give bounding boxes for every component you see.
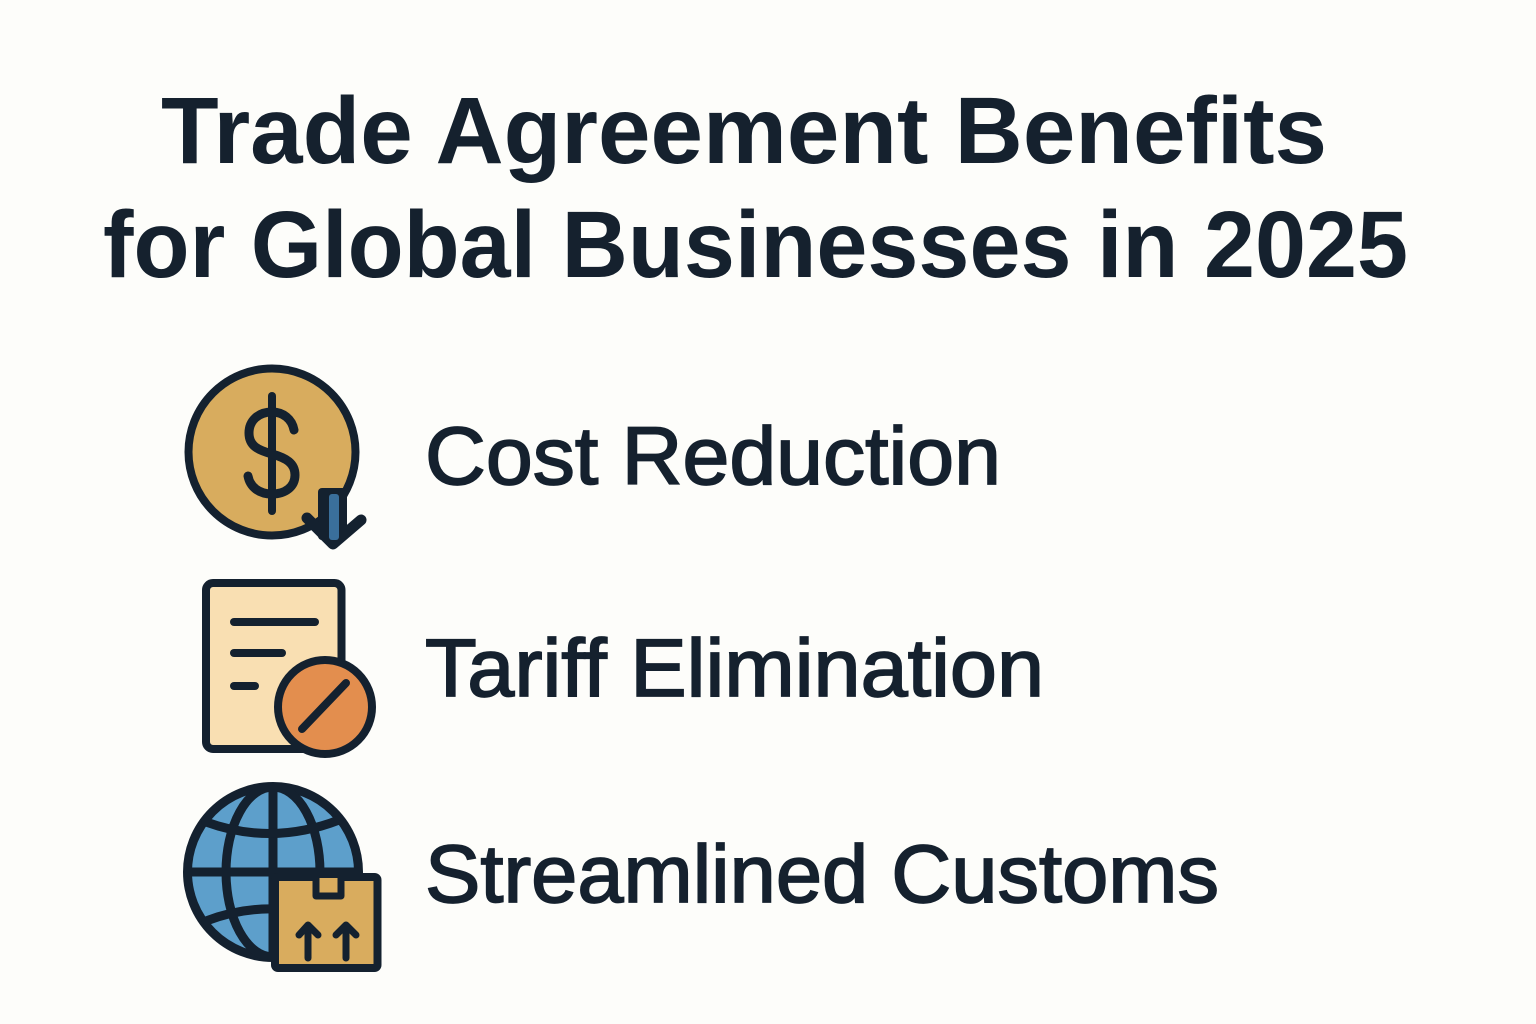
title: Trade Agreement Benefits (161, 78, 1327, 184)
label: streamlined customs: Streamlined Customs (425, 829, 1219, 920)
icon: document with prohibition badge (206, 583, 372, 754)
benefit row: tariff elimination (206, 583, 1044, 754)
title: for Global Businesses in 2025 (103, 192, 1408, 298)
benefit row: cost reduction (188, 368, 1001, 544)
icon: coin with dollar sign and down arrow (188, 368, 361, 544)
benefit row: streamlined customs (188, 786, 1219, 968)
label: tariff elimination: Tariff Elimination (425, 623, 1044, 714)
title (103, 78, 1408, 298)
label: cost reduction: Cost Reduction (425, 411, 1001, 502)
icon: globe with parcel box (188, 786, 378, 968)
